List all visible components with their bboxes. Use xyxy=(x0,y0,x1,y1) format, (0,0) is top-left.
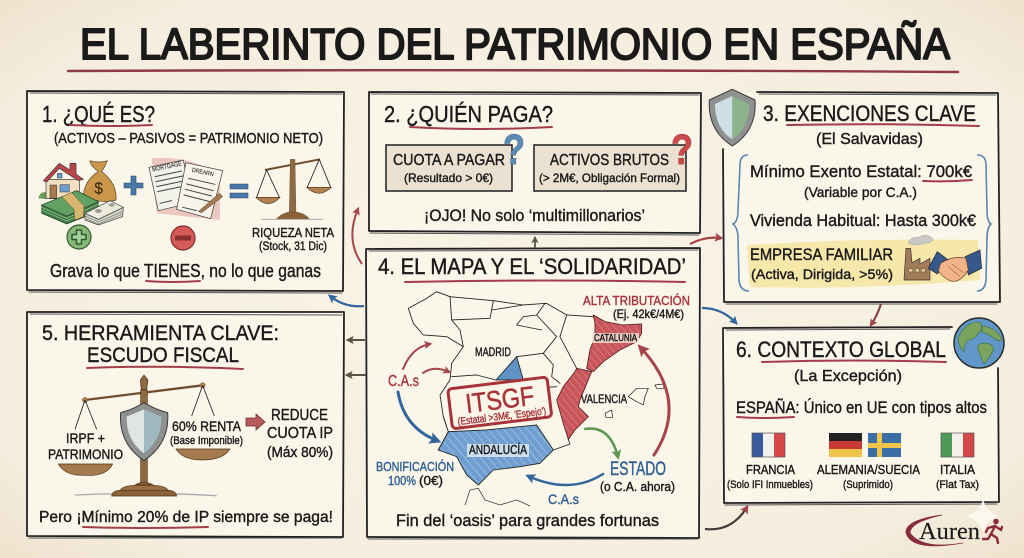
panel: 4 el mapa xyxy=(366,248,700,539)
region: Valencia xyxy=(557,368,592,439)
arrow: grey to panel 5 upper xyxy=(348,339,365,341)
country labels xyxy=(727,463,979,491)
footer text 4: Fin del ‘oasis’ para grandes fortunas xyxy=(396,511,659,530)
region: Catalunya xyxy=(587,315,642,372)
icon: plus circle xyxy=(67,225,91,249)
arrow: grey to panel 5 lower xyxy=(347,374,366,376)
heading 1: 1. ¿QUÉ ES? xyxy=(42,101,155,127)
footer text 5: Pero ¡Mínimo 20% de IP siempre se paga! xyxy=(39,509,333,526)
icon: balance with shield xyxy=(58,375,230,496)
map labels: MADRID xyxy=(475,345,511,359)
arrow: red panel 3 to 6 xyxy=(871,304,881,325)
region: Andalucia xyxy=(438,425,553,485)
arrow: blue to panel 6 xyxy=(702,308,736,323)
panel: 6 contexto global xyxy=(723,318,1004,505)
flag Sweden xyxy=(868,433,901,457)
reduce text xyxy=(267,407,333,461)
map labels: 100% xyxy=(388,473,416,488)
stamp ITSGF: (Estatal >3M€, 'Espejo') xyxy=(457,405,547,428)
panel: 2 quién paga xyxy=(369,92,701,235)
country labels: (Flat Tax) xyxy=(936,479,979,491)
right bracket xyxy=(977,155,991,291)
heading 5 xyxy=(42,322,279,369)
icon: red question: ? xyxy=(671,126,693,174)
arrow: red to panel 1 xyxy=(352,209,362,264)
icon: liabilities documents: MORTGAGE xyxy=(152,160,183,174)
country labels: ALEMANIA/SUECIA xyxy=(817,463,921,477)
net wealth label: (Stock, 31 Dic) xyxy=(259,241,327,253)
panel: 5 herramienta clave xyxy=(27,312,344,538)
box: activos brutos xyxy=(534,145,686,191)
heading 5: ESCUDO FISCAL xyxy=(87,344,239,367)
flag France xyxy=(752,433,785,457)
icon: plus xyxy=(124,176,143,195)
family business highlight xyxy=(747,240,980,288)
reduce text: REDUCE xyxy=(271,407,328,424)
arrow: up to panel 2 xyxy=(534,238,536,248)
icon: liabilities documents: DREARN xyxy=(191,168,214,178)
map labels: CATALUNIA xyxy=(594,333,637,344)
map labels: VALENCIA xyxy=(581,394,627,406)
icon: minus circle xyxy=(171,226,195,250)
footer text 1: Grava lo que TIENES, no lo que ganas xyxy=(50,261,321,281)
scale labels: 60% RENTA xyxy=(172,418,242,434)
scale labels: PATRIMONIO xyxy=(48,447,123,462)
logo: Auren: Auren xyxy=(919,519,980,545)
family business highlight: (Activa, Dirigida, >5%) xyxy=(751,266,893,282)
country labels: ITALIA xyxy=(940,463,976,477)
map labels xyxy=(376,293,690,507)
title: EL LABERINTO DEL PATRIMONIO EN ESPAÑA xyxy=(80,19,951,69)
box: cuota a pagar: (Resultado > 0€) xyxy=(404,171,493,185)
panel: 1 qué es xyxy=(27,91,344,293)
reduce text: (Máx 80%) xyxy=(267,444,333,461)
map labels: C.A.s xyxy=(548,491,579,507)
map labels: ESTADO xyxy=(610,459,666,480)
map labels: BONIFICACIÓN xyxy=(376,459,454,474)
icon: assets house money: $ xyxy=(94,180,103,197)
arrows on map xyxy=(398,344,669,485)
panel: 3 exenciones clave xyxy=(709,89,1000,304)
map of Spain xyxy=(408,292,664,506)
heading 6: 6. CONTEXTO GLOBAL xyxy=(736,337,946,362)
minimum exempt: (Variable por C.A.) xyxy=(804,184,917,200)
icon: equals xyxy=(230,184,248,198)
icon: globe xyxy=(954,318,1004,368)
outline and regions xyxy=(408,292,664,506)
box: cuota a pagar xyxy=(386,145,512,191)
country labels: (Solo IFI Inmuebles) xyxy=(727,479,813,491)
region: Madrid xyxy=(496,357,523,380)
flag Italy xyxy=(941,433,974,457)
box: cuota a pagar: CUOTA A PAGAR xyxy=(393,152,505,169)
arrow: blue to panel 1 xyxy=(330,296,364,306)
minimum exempt: Mínimo Exento Estatal: 700k€ xyxy=(750,162,973,181)
family business highlight: EMPRESA FAMILIAR xyxy=(750,246,893,264)
scale labels xyxy=(48,418,243,462)
icon: shield xyxy=(709,89,755,146)
heading 6 xyxy=(736,337,946,385)
arrow: bottom to panel 6 xyxy=(705,507,747,529)
arrow to reduce xyxy=(246,414,265,430)
heading 2: 2. ¿QUIÉN PAGA? xyxy=(384,101,553,127)
scale labels: IRPF + xyxy=(66,431,105,446)
espana line: ESPAÑA: Único en UE con tipos altos xyxy=(736,397,987,417)
box: activos brutos: ACTIVOS BRUTOS xyxy=(550,152,669,169)
reduce text: CUOTA IP xyxy=(267,425,333,442)
formula: (ACTIVOS – PASIVOS = PATRIMONIO NETO) xyxy=(54,130,323,147)
warning text: ¡OJO! No solo ‘multimillonarios’ xyxy=(424,206,645,225)
country labels: (Suprimido) xyxy=(843,479,893,491)
heading 6: (La Excepción) xyxy=(794,368,902,385)
logo: Auren xyxy=(906,499,1002,546)
map labels: C.A.s xyxy=(388,373,419,390)
box: activos brutos: (> 2M€, Obligación Formal) xyxy=(539,171,680,185)
stamp ITSGF: ITSGF xyxy=(464,381,536,419)
left bracket xyxy=(733,155,749,291)
heading 4: 4. EL MAPA Y EL ‘SOLIDARIDAD’ xyxy=(378,254,686,279)
map labels: (o C.A. ahora) xyxy=(600,479,675,494)
net wealth label: RIQUEZA NETA xyxy=(252,225,334,240)
scale labels: (Base Imponible) xyxy=(170,435,243,447)
stamp ITSGF xyxy=(448,377,552,429)
panel: 3 exenciones clave: (El Salvavidas) xyxy=(816,131,923,148)
flag Germany xyxy=(829,433,862,457)
habitual home: Vivienda Habitual: Hasta 300k€ xyxy=(750,211,977,230)
map labels: (Ej. 42k€/4M€) xyxy=(613,307,684,321)
heading 5: 5. HERRAMIENTA CLAVE: xyxy=(42,322,279,345)
arrow: red to panel 3 xyxy=(690,238,721,244)
net wealth label xyxy=(252,225,334,253)
icon: assets house money xyxy=(38,161,123,225)
map labels: ANDALUCÍA xyxy=(469,442,528,457)
map labels: ALTA TRIBUTACIÓN xyxy=(583,293,690,308)
icon: liabilities documents xyxy=(149,158,223,220)
icon: net wealth scales xyxy=(256,159,331,219)
icon: factory and handshake xyxy=(904,235,982,281)
minimum exempt xyxy=(750,162,973,200)
map labels: (0€) xyxy=(419,473,443,488)
heading 3: 3. EXENCIONES CLAVE xyxy=(763,101,976,126)
icon: blue question: ? xyxy=(503,126,525,174)
country labels: FRANCIA xyxy=(746,463,796,477)
